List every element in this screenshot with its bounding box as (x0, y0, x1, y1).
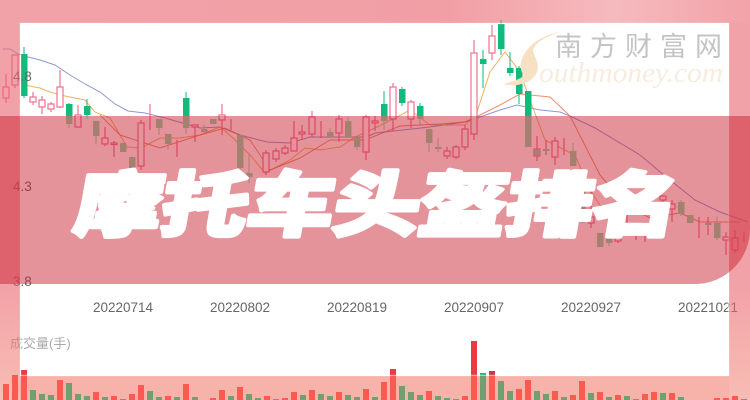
price axis labels: 4.8 (13, 69, 32, 84)
title: 摩托车头盔排名 (68, 150, 689, 251)
rising candles (hollow) (3, 25, 744, 255)
falling candles tinted inside band (66, 116, 720, 247)
falling volume bars (30, 376, 747, 400)
date axis labels (93, 300, 738, 315)
logo swoosh S (503, 32, 560, 85)
date axis labels: 20220802 (210, 300, 270, 315)
falling candles (solid) (21, 20, 720, 247)
price axis labels: 3.8 (13, 274, 32, 289)
rising volume bars (3, 376, 738, 400)
watermark: southmoney logo (503, 25, 723, 89)
moving average lines (3, 49, 748, 222)
date axis labels: 20220927 (561, 300, 621, 315)
price axis labels: 4.3 (13, 179, 32, 194)
volume bars (3, 376, 747, 400)
date axis labels: 20220907 (444, 300, 504, 315)
volume axis title: 成交量(手) (10, 336, 71, 351)
logo domain text: outhmoney.com (539, 57, 723, 89)
price chart: candlesticks and moving averages (3, 20, 748, 255)
red translucent title band (0, 116, 750, 284)
price axis labels (13, 69, 32, 289)
date axis labels: 20221021 (678, 300, 738, 315)
volume bars above the frame edge (12, 341, 495, 377)
date axis labels: 20220819 (327, 300, 387, 315)
date axis labels: 20220714 (93, 300, 154, 315)
logo Chinese name: 南方财富网 (555, 25, 722, 64)
